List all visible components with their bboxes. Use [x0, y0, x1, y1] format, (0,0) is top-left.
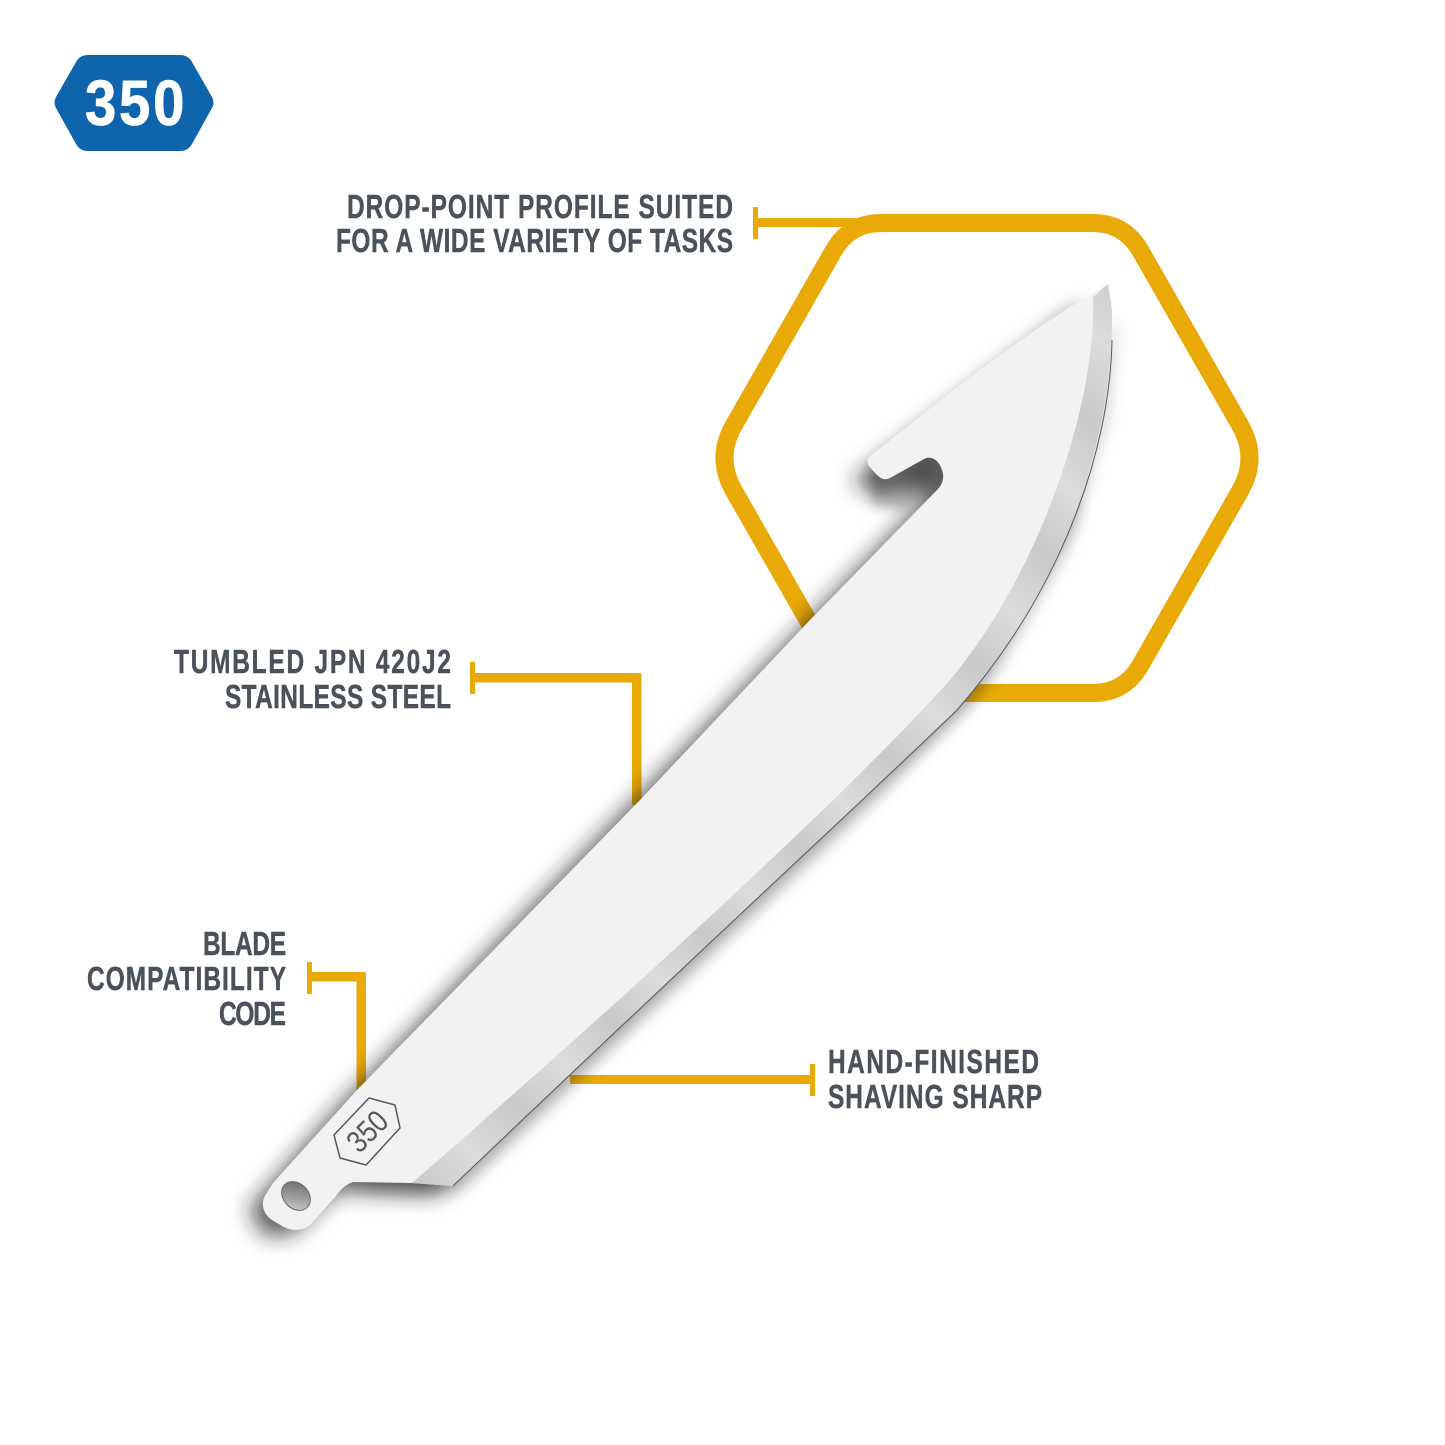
callout line: stainless steel	[470, 662, 642, 805]
sharpened edge line	[453, 340, 1112, 1186]
text: stainless steel: STAINLESS STEEL	[225, 680, 451, 716]
engraved 350 mark	[334, 1098, 400, 1165]
icon: yellow hexagon outline	[724, 223, 1250, 693]
blade bevel	[412, 284, 1112, 1186]
blade face	[263, 284, 1112, 1230]
blade shadow	[249, 305, 1118, 1237]
text: hand-finished	[828, 1045, 1042, 1116]
callout line: drop-point profile	[753, 207, 865, 239]
text: hand-finished: SHAVING SHARP	[828, 1080, 1042, 1116]
text: compatibility code: COMPATIBILITY	[87, 962, 286, 998]
text: drop-point profile	[336, 190, 733, 260]
callout line: hand-finished	[570, 1064, 815, 1096]
lanyard hole	[276, 1176, 316, 1216]
icon: blue hexagon 350 badge	[54, 55, 214, 151]
text: compatibility code: CODE	[219, 997, 286, 1033]
text: compatibility code: BLADE	[203, 927, 286, 963]
text: drop-point profile: DROP-POINT PROFILE SUITED	[347, 190, 733, 226]
callout line: compatibility code	[307, 962, 366, 1092]
text: drop-point profile: FOR A WIDE VARIETY OF TASKS	[336, 224, 733, 260]
text: hand-finished: HAND-FINISHED	[828, 1045, 1039, 1081]
text: compatibility code	[87, 927, 286, 1033]
text: stainless steel	[174, 645, 451, 716]
engraved 350 mark: 350	[340, 1104, 396, 1160]
text: stainless steel: TUMBLED JPN 420J2	[174, 645, 451, 681]
knife blade	[263, 284, 1112, 1230]
icon: blue hexagon 350 badge: 350	[85, 67, 184, 139]
